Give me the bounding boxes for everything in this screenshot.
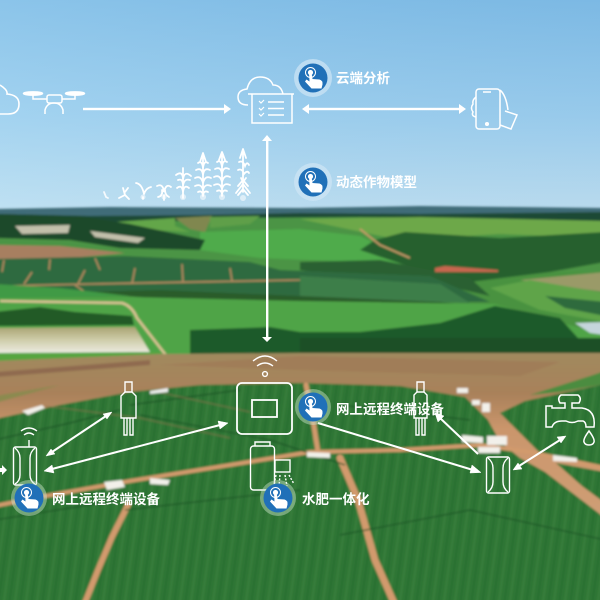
icon: left field device with wifi bbox=[14, 428, 37, 485]
right crop field bbox=[500, 384, 600, 466]
icon: crop growth stages bbox=[104, 149, 250, 201]
crop fields mid distance bbox=[0, 256, 490, 302]
label: remote terminal right: 网上远程终端设备 bbox=[336, 401, 444, 417]
button: cloud analysis bbox=[294, 59, 332, 97]
lower right wedge field bbox=[556, 463, 600, 503]
tree line on right meadow edge bbox=[190, 306, 600, 358]
button: remote terminal right bbox=[295, 389, 331, 425]
arrow: terminal to right device bbox=[318, 423, 481, 473]
left tree cluster bbox=[0, 307, 134, 326]
label: cloud analysis: 云端分析 bbox=[336, 70, 390, 86]
field roads bbox=[0, 385, 600, 600]
icon: left soil sensor bbox=[121, 382, 136, 435]
icon: terminal box bbox=[237, 383, 292, 434]
bare soil patch bbox=[0, 245, 125, 259]
icon: fertigation tank with sprinkler bbox=[250, 442, 294, 490]
icon: cloud cropped at left edge bbox=[0, 85, 19, 114]
distant horizon hills bbox=[0, 206, 600, 235]
pond path bbox=[0, 301, 165, 366]
farm buildings and trucks bbox=[22, 388, 577, 490]
icon: right field device bbox=[486, 457, 510, 493]
icon: cloud data board bbox=[238, 77, 294, 123]
dark field boundaries bbox=[0, 390, 600, 540]
green hill slopes bbox=[0, 217, 600, 272]
circular crop field bbox=[0, 383, 600, 600]
icon: drone bbox=[24, 92, 84, 114]
sky background bbox=[0, 0, 600, 212]
tree lines bbox=[0, 214, 205, 250]
arrow: left device to sensor bbox=[46, 412, 112, 456]
tree band above meadow bbox=[80, 290, 480, 306]
base ground colours bbox=[0, 212, 600, 357]
icon: wifi above terminal bbox=[253, 356, 277, 376]
light green meadow bbox=[0, 297, 600, 360]
arrow: right device to sensor bbox=[435, 413, 478, 454]
label: dynamic crop model: 动态作物模型 bbox=[336, 174, 417, 190]
button: dynamic crop model bbox=[294, 163, 332, 201]
arrow: left device to terminal bbox=[44, 421, 228, 473]
mid field tracks bbox=[0, 258, 300, 292]
arrow: small inbound arrow at left edge bbox=[0, 465, 7, 475]
soil strip bbox=[0, 353, 600, 600]
icon: water faucet bbox=[546, 395, 594, 445]
arrow: drone to cloud bbox=[83, 104, 231, 114]
button: fertigation bbox=[260, 480, 296, 516]
arrow: cloud to phone two-way bbox=[302, 104, 466, 114]
label: remote terminal left: 网上远程终端设备 bbox=[52, 491, 160, 507]
red roofs village bbox=[435, 266, 498, 272]
white farm buildings bbox=[15, 225, 145, 243]
arrow: right device to faucet bbox=[513, 436, 566, 470]
icon: hand holding phone bbox=[472, 89, 517, 129]
pond bbox=[0, 327, 150, 353]
tan hill patch bbox=[520, 272, 600, 292]
farmland landscape photo bbox=[0, 206, 600, 600]
icon: right sensor bbox=[414, 382, 427, 435]
label: fertigation: 水肥一体化 bbox=[302, 491, 370, 507]
arrow: vertical cloud to terminal bbox=[262, 135, 272, 342]
button: remote terminal left bbox=[11, 480, 47, 516]
